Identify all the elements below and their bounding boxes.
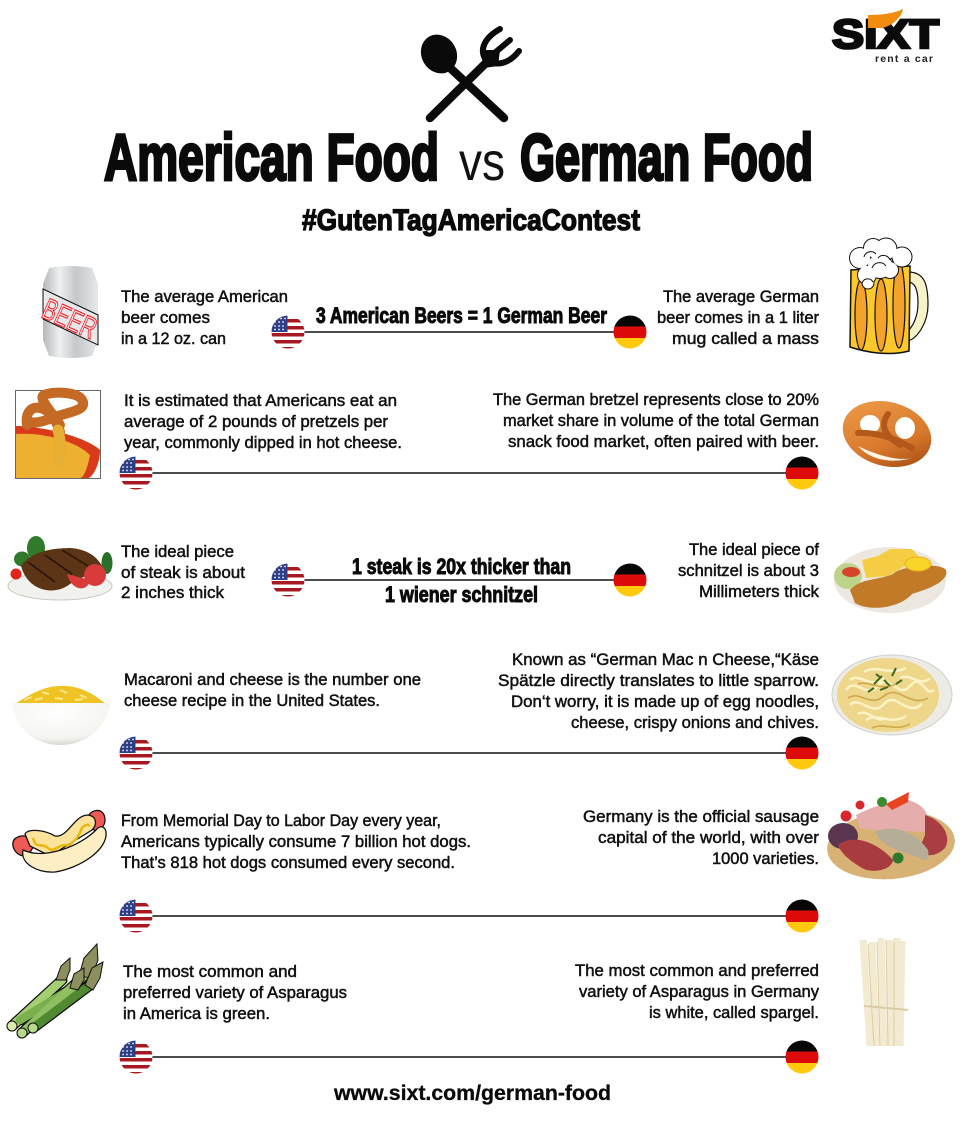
text: macaroni: Macaroni and cheese is the number one bbox=[124, 670, 421, 689]
icon: beer can bbox=[37, 266, 102, 358]
title: vs bbox=[459, 132, 505, 192]
text: hot dogs: From Memorial Day to Labor Day every year, bbox=[121, 811, 441, 830]
title: American Food bbox=[104, 120, 439, 194]
panel: pretzel bbox=[16, 390, 939, 491]
text: German beer: mug called a mass bbox=[672, 329, 819, 348]
text: American pretzels bbox=[124, 391, 402, 452]
text: steak bbox=[121, 542, 245, 602]
timeline: asparagus bbox=[119, 1040, 819, 1075]
image: macaroni bowl bbox=[12, 686, 110, 745]
text: macaroni bbox=[124, 670, 421, 710]
text: green asparagus: The most common and bbox=[123, 962, 297, 981]
text: American beer bbox=[121, 287, 288, 348]
text: Käse Spätzle: Don‘t worry, it is made up of egg noodles, bbox=[511, 692, 819, 711]
image: schnitzel plate bbox=[834, 547, 946, 613]
panel: mac and cheese bbox=[12, 650, 952, 771]
text: German bretzel: market share in volume of the total German bbox=[503, 411, 819, 430]
title: German Food bbox=[520, 120, 813, 194]
timeline: pretzel bbox=[119, 456, 819, 491]
footer url: www.sixt.com/german-food bbox=[333, 1082, 611, 1105]
text: steak: of steak is about bbox=[121, 563, 245, 582]
comparison: thickness: 1 steak is 20x thicker than bbox=[352, 554, 571, 579]
text: Käse Spätzle: Spätzle directly translates to little sparrow. bbox=[498, 671, 819, 690]
text: American beer: The average American bbox=[121, 287, 288, 306]
title bbox=[104, 120, 813, 194]
panel: asparagus bbox=[7, 938, 908, 1075]
text: Käse Spätzle: cheese, crispy onions and chives. bbox=[571, 713, 819, 732]
panel: hot dogs vs sausage bbox=[13, 792, 958, 934]
comparison: thickness: 1 wiener schnitzel bbox=[385, 582, 538, 607]
comparison: thickness bbox=[271, 554, 647, 607]
panel: steak vs schnitzel bbox=[8, 536, 946, 613]
text: Käse Spätzle: Known as “German Mac n Cheese,“Käse bbox=[512, 650, 819, 669]
text: sausage bbox=[583, 807, 819, 868]
image: white asparagus bundle bbox=[863, 938, 908, 1046]
text: green asparagus bbox=[123, 962, 347, 1023]
comparison: beer bbox=[271, 303, 647, 350]
text: green asparagus: preferred variety of Asparagus bbox=[123, 983, 347, 1002]
text: American beer: beer comes bbox=[121, 308, 210, 327]
text: German bretzel: snack food market, often paired with beer. bbox=[508, 432, 819, 451]
icon: hot dog bbox=[13, 810, 106, 872]
text: steak: 2 inches thick bbox=[121, 583, 225, 602]
text: macaroni: cheese recipe in the United States. bbox=[124, 691, 380, 710]
text: German bretzel bbox=[493, 390, 819, 451]
text: sausage: 1000 varieties. bbox=[712, 849, 819, 868]
hashtag heading: #GutenTagAmericaContest bbox=[302, 204, 640, 237]
text: white asparagus: The most common and preferred bbox=[575, 961, 819, 980]
image: spaetzle plate bbox=[832, 655, 952, 735]
text: hot dogs: Americans typically consume 7 billion hot dogs. bbox=[121, 832, 471, 851]
text: German bretzel: The German bretzel represents close to 20% bbox=[493, 390, 819, 409]
timeline: mac and cheese bbox=[119, 736, 819, 771]
text: German beer: beer comes in a 1 liter bbox=[657, 308, 819, 327]
icon: beer mug bbox=[849, 238, 928, 354]
text: German beer bbox=[657, 287, 819, 348]
text: white asparagus: is white, called spargel. bbox=[649, 1003, 819, 1022]
text: American beer: in a 12 oz. can bbox=[121, 329, 226, 348]
logo: Sixt rent a car: rent a car bbox=[875, 53, 933, 65]
text: hot dogs bbox=[121, 811, 471, 872]
timeline: hot dogs bbox=[119, 899, 819, 934]
logo: Sixt rent a car: SIXT bbox=[832, 11, 939, 57]
text: green asparagus: in America is green. bbox=[123, 1004, 270, 1023]
comparison: beer: 3 American Beers = 1 German Beer bbox=[316, 303, 607, 328]
logo: Sixt rent a car bbox=[832, 9, 939, 65]
text: American pretzels: It is estimated that Americans eat an bbox=[124, 391, 397, 410]
text: schnitzel: schnitzel is about 3 bbox=[678, 561, 819, 580]
image: sausage platter bbox=[824, 792, 958, 884]
text: American pretzels: year, commonly dipped in hot cheese. bbox=[124, 433, 402, 452]
icon: beer can: BEER bbox=[37, 293, 102, 346]
text: American pretzels: average of 2 pounds of pretzels per bbox=[124, 412, 388, 431]
text: schnitzel bbox=[678, 540, 820, 601]
text: German beer: The average German bbox=[663, 287, 819, 306]
text: sausage: capital of the world, with over bbox=[598, 828, 819, 847]
text: Käse Spätzle bbox=[498, 650, 819, 732]
text: white asparagus: variety of Asparagus in Germany bbox=[579, 982, 820, 1001]
text: schnitzel: Millimeters thick bbox=[699, 582, 820, 601]
text: steak: The ideal piece bbox=[121, 542, 234, 561]
text: hot dogs: That’s 818 hot dogs consumed every second. bbox=[121, 853, 455, 872]
text: white asparagus bbox=[575, 961, 820, 1022]
icon: steak on plate bbox=[8, 536, 112, 600]
text: sausage: Germany is the official sausage bbox=[583, 807, 819, 826]
icon: green asparagus bbox=[7, 944, 103, 1038]
icon: bretzel bbox=[835, 391, 939, 477]
panel: beer bbox=[37, 238, 928, 358]
image: pretzel dipped in cheese bbox=[16, 390, 100, 478]
text: schnitzel: The ideal piece of bbox=[689, 540, 819, 559]
icon: crossed spoon and fork bbox=[414, 28, 519, 118]
